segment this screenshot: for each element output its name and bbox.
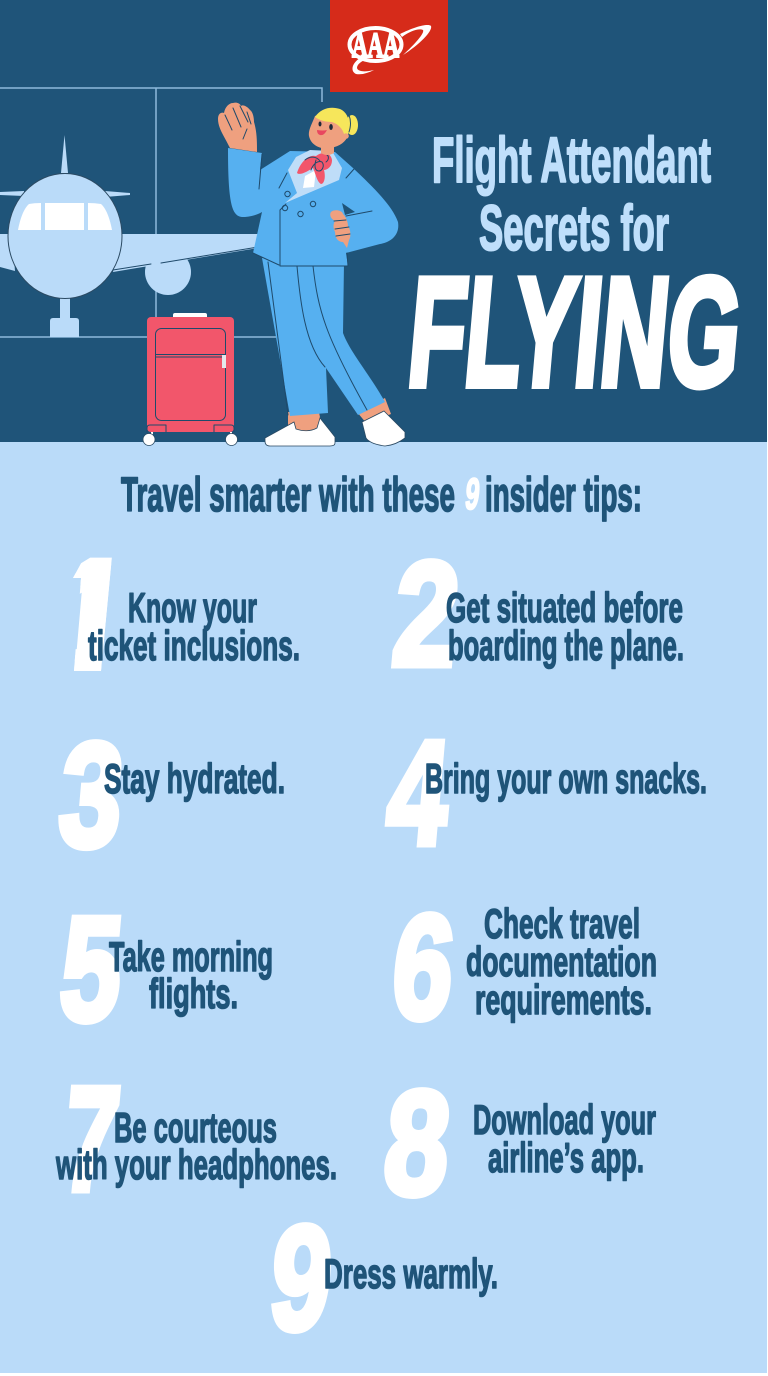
logo: AAA: AAA (352, 25, 399, 65)
tip 9: 9 (264, 1196, 339, 1361)
raised hand (218, 103, 257, 152)
hand on hip (330, 210, 350, 248)
tip 3: 3 (53, 713, 130, 878)
tip 4 (381, 711, 707, 876)
tip 5: flights. (149, 970, 238, 1017)
head (309, 108, 358, 155)
tip 1 (73, 558, 299, 671)
tip 6: 6 (386, 885, 461, 1050)
subheading: insider tips: (485, 469, 642, 522)
ankles (288, 398, 391, 432)
collar and scarf (285, 150, 342, 203)
tip 5: 5 (54, 887, 129, 1052)
tip 7: 7 (57, 1057, 126, 1222)
panel: tips background (0, 442, 767, 1373)
tip 3 (53, 713, 285, 878)
tip 8: 8 (378, 1061, 457, 1226)
tip 9 (264, 1196, 498, 1361)
subheading: 9 (463, 470, 482, 519)
illustration: red suitcase (143, 313, 238, 446)
tip 6: requirements. (475, 976, 652, 1023)
title (402, 124, 748, 418)
illustration: airplane (0, 135, 258, 337)
tip 1: 1 (41, 531, 144, 705)
tip 8: Download your (473, 1096, 656, 1143)
subheading: Travel smarter with these (121, 469, 455, 522)
tip 8 (378, 1061, 656, 1226)
tip 2 (387, 532, 684, 697)
tip 5: Take morning (109, 933, 273, 980)
tip 1: Know your (128, 584, 257, 631)
tip 6: documentation (466, 938, 657, 985)
tip 1: ticket inclusions. (88, 622, 300, 669)
tip 9: Dress warmly. (324, 1250, 498, 1297)
tip 6 (386, 885, 657, 1050)
tip 7: Be courteous (114, 1104, 277, 1151)
shoes (265, 411, 405, 446)
tip 3: Stay hydrated. (104, 755, 285, 802)
tip 8: airline’s app. (488, 1134, 644, 1181)
tip 6: Check travel (484, 900, 640, 947)
panel: header background (0, 0, 767, 442)
tip 7: with your headphones. (55, 1141, 337, 1188)
illustration: flight attendant (218, 103, 405, 446)
logo: AAA (330, 0, 448, 92)
illustration: airport window frame (0, 88, 322, 337)
tip 2: 2 (387, 532, 466, 697)
tip 4: 4 (381, 711, 456, 876)
jacket (228, 148, 398, 266)
tip 7 (55, 1057, 337, 1222)
tip 5 (54, 887, 273, 1052)
trousers (262, 258, 385, 416)
